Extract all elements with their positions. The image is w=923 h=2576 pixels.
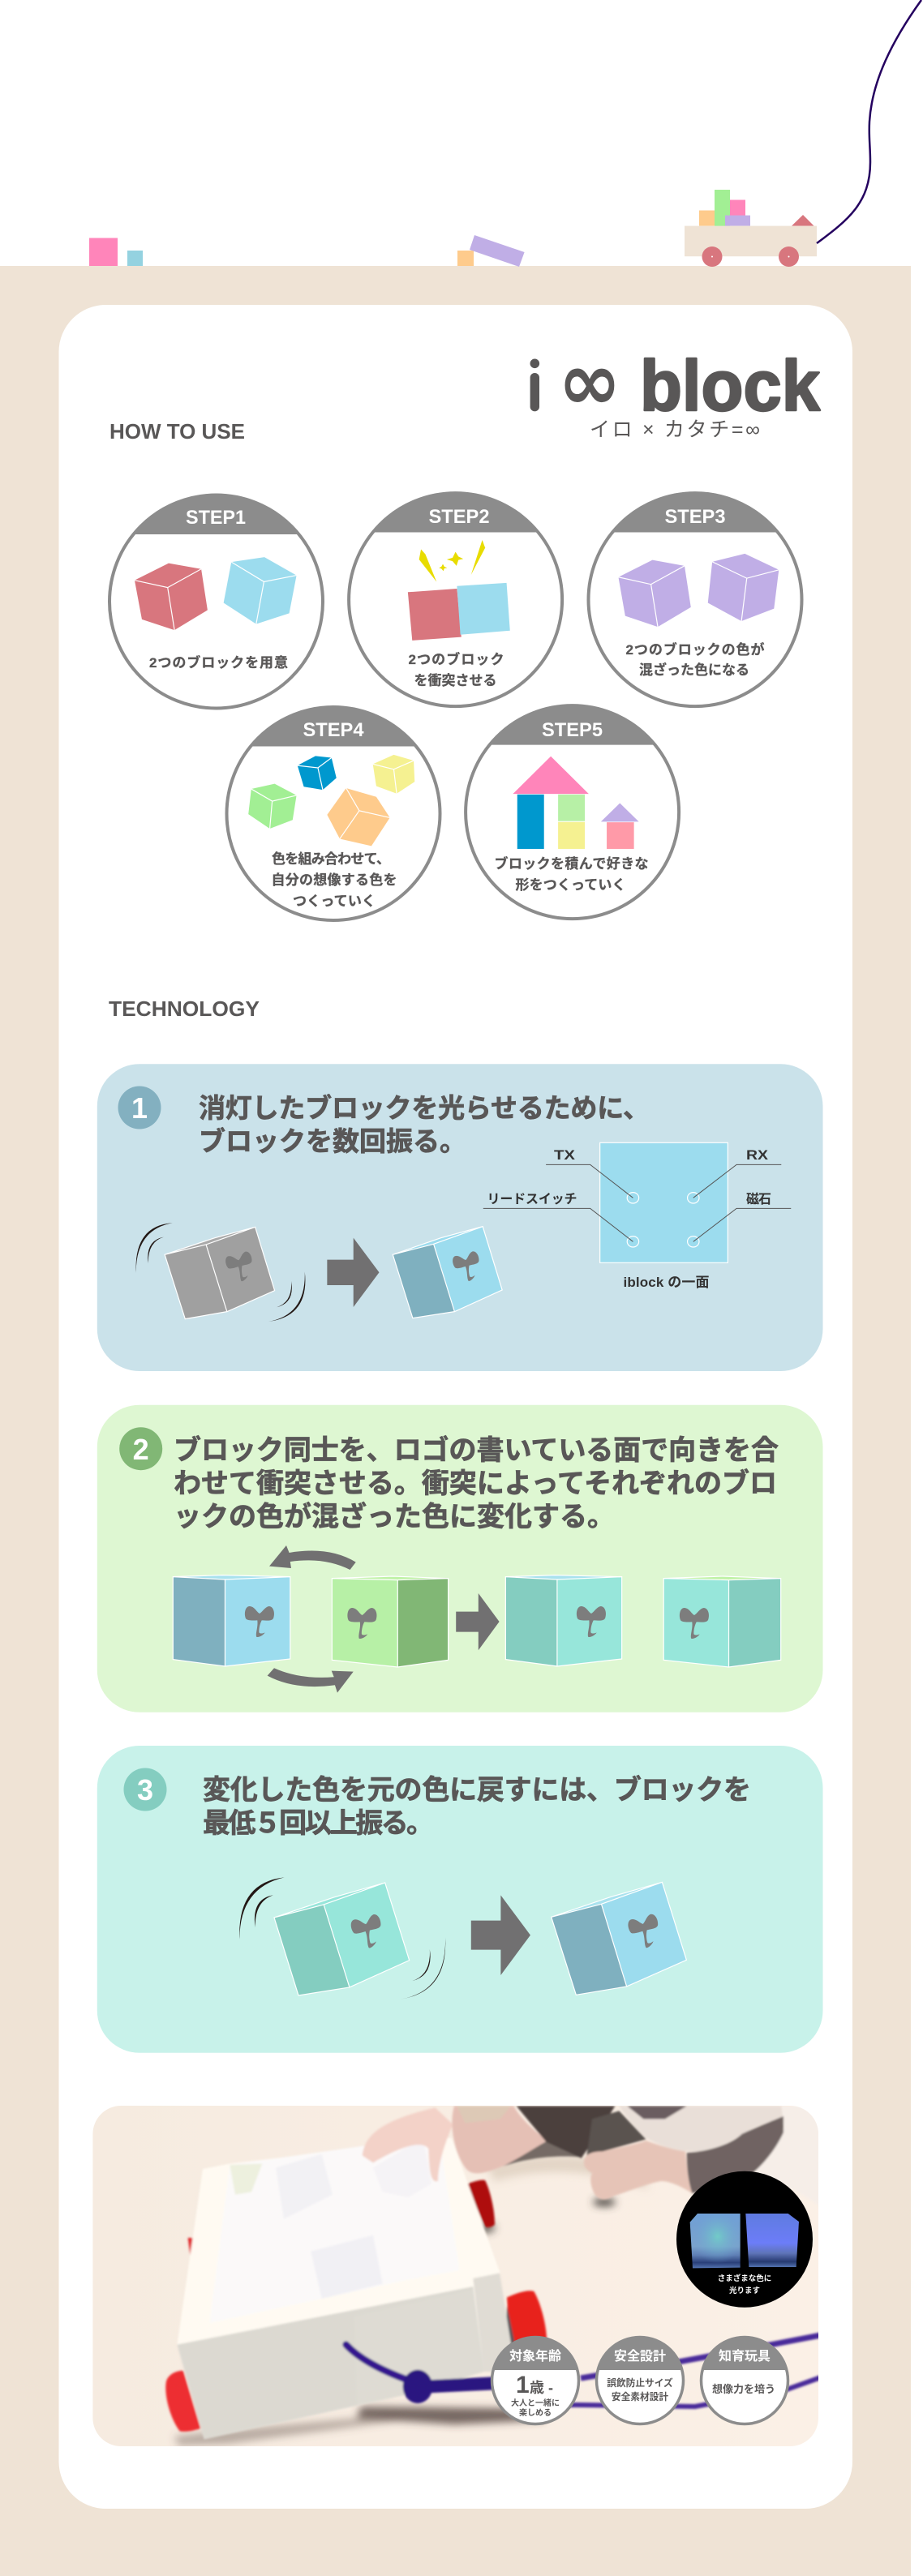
- step 5: ブロックを積んで好きな: [495, 855, 649, 872]
- badge: educational toy: 想像力を培う: [712, 2383, 775, 2395]
- number badge 3: 3: [137, 1773, 153, 1807]
- diagram: one face of iblock: TX: [554, 1147, 576, 1163]
- badge: target age: 大人と一緒に: [511, 2398, 560, 2408]
- white content card: [58, 305, 852, 2509]
- diagram: one face of iblock: [483, 1142, 791, 1290]
- panel: step 3 reset: [97, 1746, 823, 2053]
- badge: educational toy: [701, 2336, 788, 2424]
- panel 3 text: 最低５回以上振る。: [203, 1808, 434, 1839]
- step 2: 2つのブロック: [409, 651, 504, 667]
- number badge 1: 1: [131, 1091, 148, 1125]
- badge: safety design: [597, 2336, 683, 2424]
- shake illustration: [136, 1223, 502, 1322]
- step 4: 色を組み合わせて、: [272, 851, 390, 867]
- number badge 1: [118, 1087, 161, 1129]
- panel 2 text: ブロック同士を、ロゴの書いている面で向きを合: [174, 1434, 779, 1466]
- panel: step 1 shake to light: [97, 1064, 823, 1371]
- step 4: [227, 705, 440, 920]
- badge: target age: 歳: [530, 2380, 544, 2396]
- step 3: 2つのブロックの色が: [626, 641, 764, 658]
- callout: various glowing colors: [676, 2171, 813, 2308]
- toy blocks on frame, middle: [457, 235, 525, 267]
- step 4: STEP4: [303, 719, 364, 741]
- logo subtitle: イロ × カタチ=∞: [590, 418, 760, 441]
- badge: target age: [492, 2336, 579, 2424]
- photo right half: baby legs and clothes: [451, 2106, 785, 2343]
- badge: target age: 対象年齢: [509, 2348, 561, 2364]
- badge: target age: 1: [516, 2372, 530, 2398]
- step 1: [109, 494, 323, 709]
- diagram: one face of iblock: 磁石: [746, 1192, 771, 1207]
- logo: block: [640, 345, 821, 426]
- panel 2 text: ックの色が混ざった色に変化する。: [174, 1501, 615, 1532]
- badge: safety design: 誤飲防止サイズ: [607, 2377, 673, 2389]
- badge: safety design: 安全設計: [614, 2348, 666, 2364]
- step 2: STEP2: [428, 506, 490, 528]
- panel: step 2 collide: [97, 1405, 823, 1712]
- step 5: 形をつくっていく: [516, 877, 626, 893]
- panel 1 text: 消灯したブロックを光らせるために、: [199, 1093, 650, 1123]
- panel 2 text: わせて衝突させる。衝突によってそれぞれのブロ: [174, 1468, 777, 1499]
- heading: technology: TECHNOLOGY: [109, 997, 260, 1021]
- heading: how to use: HOW TO USE: [109, 419, 245, 444]
- step 3: STEP3: [665, 506, 725, 528]
- photo: baby playing with block cart: [92, 2106, 822, 2446]
- number badge 3: [123, 1768, 167, 1811]
- photo left half: block cart: [165, 2107, 511, 2439]
- diagram: one face of iblock: iblock の一面: [623, 1275, 709, 1290]
- callout: various glowing colors: 光ります: [729, 2286, 760, 2295]
- badge: educational toy: 知育玩具: [719, 2348, 771, 2364]
- diagram: one face of iblock: リードスイッチ: [487, 1192, 577, 1207]
- step 3: 混ざった色になる: [639, 662, 749, 678]
- number badge 2: 2: [133, 1433, 149, 1466]
- badge: target age: -: [548, 2380, 553, 2396]
- step 4: 自分の想像する色を: [271, 872, 397, 888]
- step 1: 2つのブロックを用意: [149, 654, 288, 671]
- panel 3 text: 変化した色を元の色に戻すには、ブロックを: [203, 1774, 751, 1806]
- reset illustration: [239, 1877, 686, 2000]
- step 1: STEP1: [186, 507, 246, 529]
- toy cart with blocks: [685, 190, 817, 267]
- cart pull string: [817, 0, 921, 243]
- step 5: [466, 705, 679, 919]
- collide illustration: [173, 1545, 781, 1693]
- photo: blurred floor shadows: [174, 2155, 649, 2445]
- callout: various glowing colors: さまざまな色に: [718, 2274, 771, 2283]
- logo: [530, 334, 821, 429]
- number badge 2: [119, 1427, 162, 1470]
- badge: target age: 楽しめる: [519, 2407, 552, 2418]
- photo: purple rope: [581, 2335, 821, 2378]
- logo: ∞: [558, 334, 621, 429]
- toy blocks on frame, left: [89, 238, 143, 266]
- step 2: [349, 491, 562, 706]
- panel 1 text: ブロックを数回振る。: [199, 1126, 466, 1156]
- step 3: [589, 491, 801, 706]
- step 5: STEP5: [542, 719, 603, 741]
- badge: safety design: 安全素材設計: [612, 2391, 668, 2402]
- step 4: つくっていく: [293, 894, 376, 909]
- step 2: を衝突させる: [414, 673, 496, 688]
- diagram: one face of iblock: RX: [746, 1147, 769, 1163]
